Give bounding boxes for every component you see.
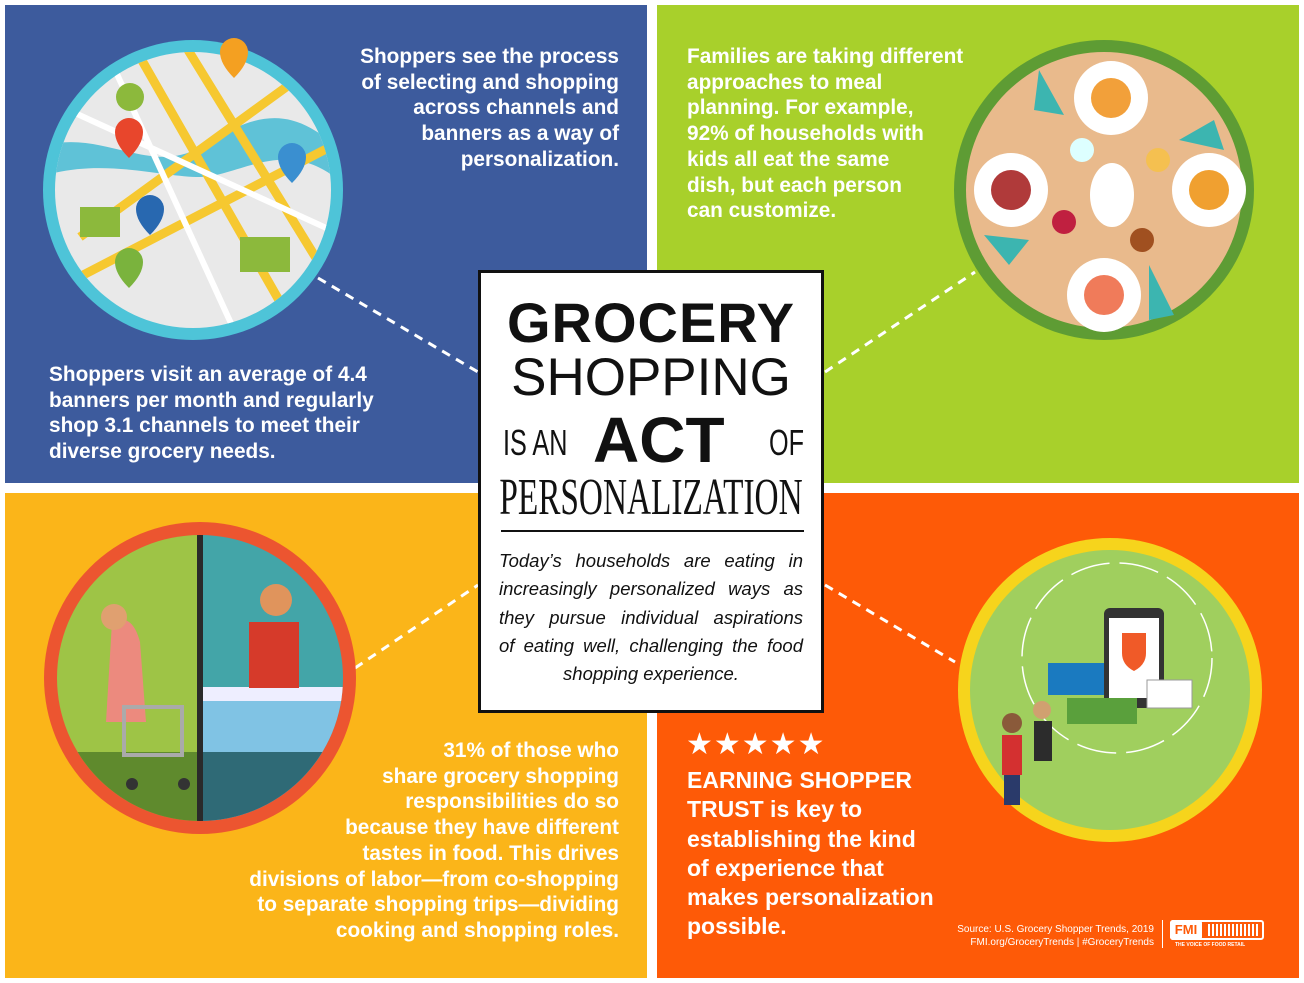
text: families meal planning: 92% of households with <box>687 122 924 145</box>
text: earning shopper trust: possible. <box>687 913 787 939</box>
center title box <box>478 270 824 713</box>
heading: is an act of: ACT <box>593 404 725 476</box>
text: earning shopper trust: establishing the kind <box>687 826 916 852</box>
icon: trust circle <box>958 538 1262 842</box>
text: channels personalization: banners as a way of <box>421 122 619 145</box>
logo: FMI: THE VOICE OF FOOD RETAIL <box>1175 942 1245 948</box>
text: shared responsibilities: share grocery shopping <box>382 765 619 788</box>
text: banners stat: shop 3.1 channels to meet their <box>49 414 360 437</box>
text: channels personalization: across channels and <box>413 96 619 119</box>
heading: grocery: GROCERY <box>507 291 795 354</box>
text: shared responsibilities: tastes in food. This drives <box>362 842 619 865</box>
text: intro: shopping experience. <box>563 663 739 684</box>
text: shared responsibilities: because they have different <box>345 816 619 839</box>
text: earning shopper trust: EARNING SHOPPER <box>687 767 912 793</box>
heading: is an act of: OF <box>769 422 804 463</box>
text: families meal planning: approaches to meal <box>687 71 882 94</box>
text: intro <box>499 550 804 684</box>
text: channels personalization <box>360 45 620 171</box>
text: banners stat: banners per month and regularly <box>49 389 374 412</box>
icon: city map circle <box>43 38 343 340</box>
text: intro: increasingly personalized ways as <box>499 578 803 599</box>
heading: is an act of: IS AN <box>503 422 567 463</box>
text: intro: of eating well, challenging the food <box>499 635 803 656</box>
icon: dinner table circle <box>954 40 1254 340</box>
text: families meal planning: dish, but each person <box>687 174 902 197</box>
text: banners stat: Shoppers visit an average of 4.4 <box>49 363 367 386</box>
logo: FMI: FMI <box>1175 922 1197 937</box>
logo: FMI <box>1170 920 1264 948</box>
text: earning shopper trust: TRUST is key to <box>687 796 862 822</box>
heading: personalization: PERSONALIZATION <box>499 469 803 526</box>
text: source: FMI.org/GroceryTrends | #GroceryTrends <box>970 937 1154 948</box>
text: channels personalization: Shoppers see the process <box>360 45 619 68</box>
text: earning shopper trust: of experience that <box>687 855 884 881</box>
text: source <box>957 924 1154 948</box>
text: families meal planning: Families are taking different <box>687 45 963 68</box>
panel: orange trust <box>657 493 1299 978</box>
text: families meal planning <box>687 45 963 222</box>
text: banners stat <box>49 363 374 463</box>
icon: shoppers split circle <box>44 522 356 834</box>
text: intro: Today’s households are eating in <box>499 550 803 571</box>
text: channels personalization: of selecting and shopping <box>361 71 619 94</box>
text: families meal planning: can customize. <box>687 199 836 222</box>
panel: green families <box>657 5 1299 483</box>
text: families meal planning: planning. For example, <box>687 96 914 119</box>
text: shared responsibilities: cooking and shopping roles. <box>336 919 619 942</box>
text: banners stat: diverse grocery needs. <box>49 440 276 463</box>
text: intro: they pursue individual aspirations <box>499 607 803 628</box>
text: shared responsibilities: responsibilities do so <box>405 790 619 813</box>
text: channels personalization: personalization. <box>461 148 619 171</box>
text: source: Source: U.S. Grocery Shopper Trends, 2019 <box>957 924 1154 935</box>
panel: yellow shared responsibilities <box>5 493 647 978</box>
text: shared responsibilities: 31% of those who <box>443 739 619 762</box>
panel: blue shoppers <box>5 5 647 483</box>
text: families meal planning: kids all eat the same <box>687 148 889 171</box>
text: earning shopper trust <box>687 767 934 939</box>
text: earning shopper trust: makes personalization <box>687 884 934 910</box>
text: shared responsibilities <box>249 739 619 942</box>
text: shared responsibilities: divisions of labor—from co-shopping <box>249 868 619 891</box>
text: shared responsibilities: to separate shopping trips—dividing <box>257 893 619 916</box>
heading: is an act of <box>503 404 804 476</box>
heading: shopping: SHOPPING <box>511 348 791 407</box>
icon: five stars: ★★★★★ <box>686 728 825 761</box>
